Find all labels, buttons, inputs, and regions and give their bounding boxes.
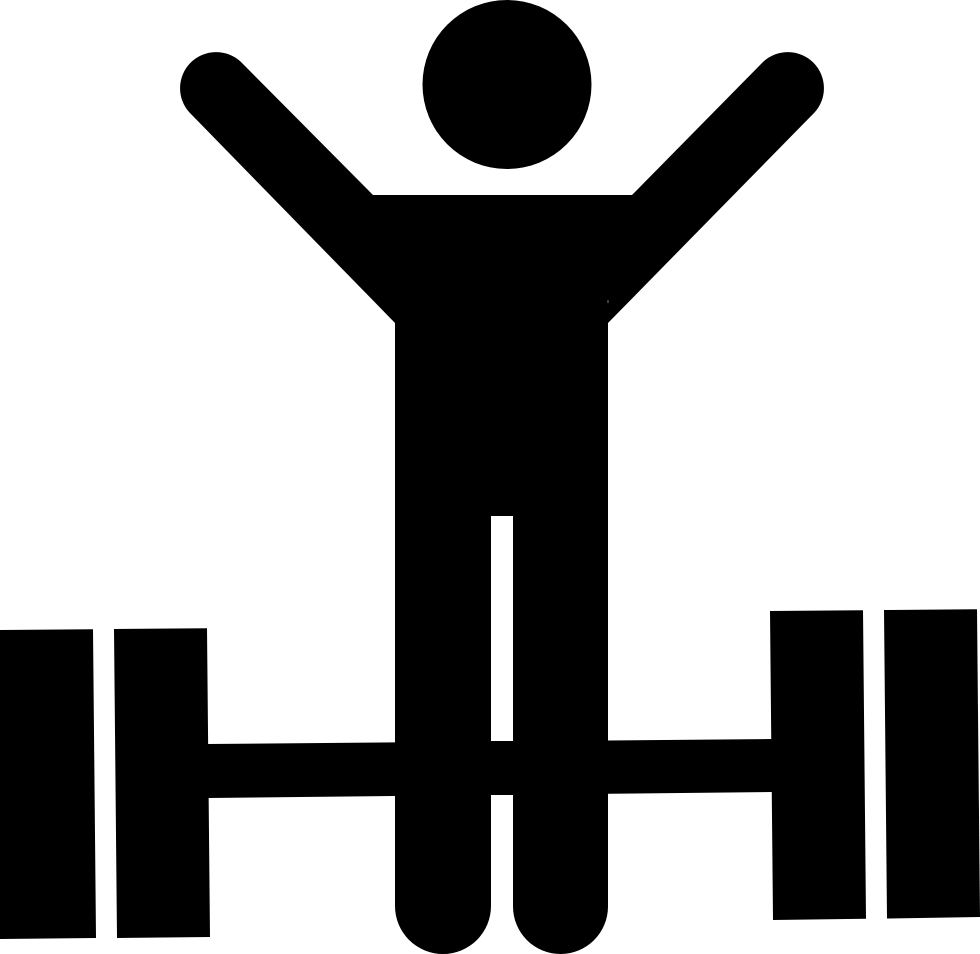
barbell — [0, 609, 980, 939]
person — [180, 0, 824, 954]
